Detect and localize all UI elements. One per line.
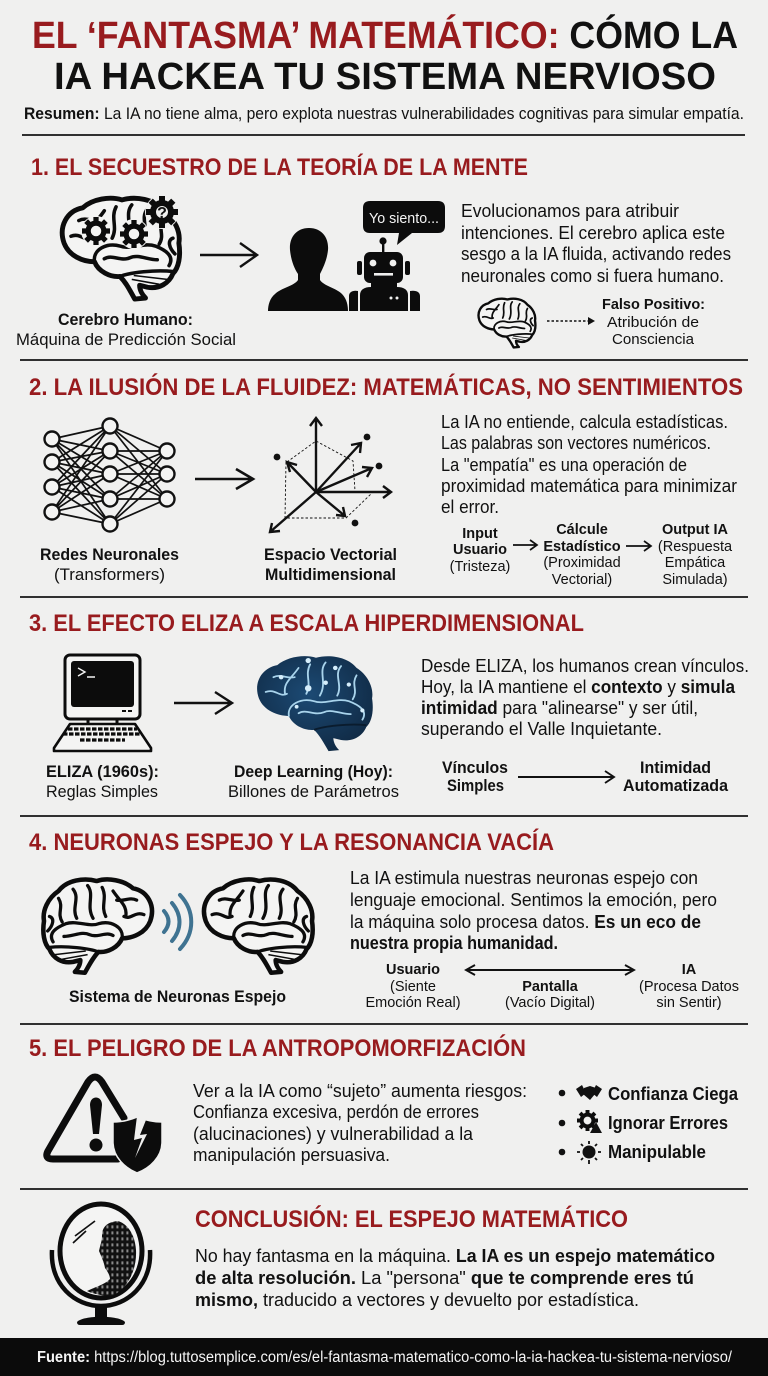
icon: waves [164, 895, 191, 949]
heading 4: 4. NEURONAS ESPEJO Y LA RESONANCIA VACÍA [29, 828, 554, 856]
summary: Resumen: La IA no tiene alma, pero explota nuestras vulnerabilidades cognitivas para simular empatía. [24, 105, 744, 123]
list: risks: Manipulable [608, 1141, 706, 1162]
panel: conclusion [52, 1204, 715, 1325]
flow: input to output: Vectorial) [552, 572, 612, 588]
caption: vector space: Espacio Vectorial [264, 545, 397, 564]
flow: input to output: (Tristeza) [450, 559, 510, 575]
flow: input to output: (Respuesta [658, 539, 733, 555]
diagram: user screen AI: Emoción Real) [365, 995, 461, 1011]
speech bubble: Yo siento... [369, 210, 439, 227]
text block 3: Desde ELIZA, los humanos crean vínculos. [421, 656, 749, 676]
caption: deep learning: Deep Learning (Hoy): [234, 762, 393, 781]
icon: neural network [44, 418, 174, 532]
text block 1: sesgo a la IA fluida, activando redes [461, 244, 731, 264]
text block 5: manipulación persuasiva. [193, 1145, 390, 1165]
text block 5 [193, 1081, 527, 1165]
text block 3: Hoy, la IA mantiene el contexto y simula [421, 677, 736, 697]
icon: brain with gears [62, 189, 185, 299]
conclusion text: mismo, traducido a vectores y devuelto por estadística. [195, 1290, 639, 1310]
flow: input to output: Empática [665, 555, 726, 571]
caption: human brain: Máquina de Predicción Social [16, 330, 236, 349]
heading 1: 1. EL SECUESTRO DE LA TEORÍA DE LA MENTE [31, 153, 528, 181]
flow: input to output: Estadístico [543, 539, 621, 555]
caption: ELIZA: ELIZA (1960s): [46, 762, 159, 781]
caption: deep learning [228, 762, 399, 801]
false positive label: Falso Positivo: [602, 296, 705, 313]
flow: bonds to intimacy: Vínculos [442, 758, 508, 777]
text block 4 [350, 868, 717, 953]
icon: right brain [204, 879, 313, 973]
icon: glowing blue brain [257, 656, 373, 751]
diagram: user screen AI: Usuario [386, 962, 440, 978]
caption: neural networks: (Transformers) [54, 565, 165, 584]
footer: source [0, 1338, 768, 1376]
caption: human brain [16, 310, 236, 349]
arrow [174, 692, 232, 714]
text block 2: La "empatía" es una operación de [441, 455, 687, 475]
icon: robot [349, 237, 420, 311]
diagram: user screen AI: IA [682, 962, 697, 978]
heading 3: 3. EL EFECTO ELIZA A ESCALA HIPERDIMENSIONAL [29, 610, 584, 637]
icon: person silhouette [268, 228, 348, 311]
text block 1: Evolucionamos para atribuir [461, 201, 679, 221]
icon: brain with gears: ? [157, 205, 167, 222]
conclusion text [195, 1246, 715, 1310]
icon: retro computer [54, 655, 151, 751]
panel: section 1 [16, 153, 731, 349]
text block 3: superando el Valle Inquietante. [421, 719, 662, 739]
flow: input to output: Output IA [662, 522, 729, 538]
icon: mirror [52, 1204, 150, 1325]
text block 2 [441, 412, 737, 517]
flow: bonds to intimacy [442, 758, 729, 795]
icon: left brain [43, 879, 152, 973]
flow: input to output [450, 522, 733, 588]
text block 5: Confianza excesiva, perdón de errores [193, 1102, 479, 1122]
flow: input to output: (Proximidad [543, 555, 621, 571]
panel: section 4 [29, 828, 739, 1011]
diagram: user screen AI: (Siente [390, 979, 436, 995]
icon: handshake [576, 1085, 602, 1100]
icon: alert bulb [577, 1141, 601, 1164]
panel: section 5 [29, 1034, 739, 1173]
text block 1: intenciones. El cerebro aplica este [461, 223, 725, 243]
flow: bonds to intimacy: Simples [447, 776, 504, 795]
caption: neural networks: Redes Neuronales [40, 545, 179, 564]
caption: human brain: Cerebro Humano: [58, 310, 193, 329]
text block 3: intimidad para "alinearse" y ser útil, [421, 698, 698, 718]
text block 2: proximidad matemática para minimizar [441, 476, 737, 496]
caption: vector space: Multidimensional [265, 565, 396, 584]
caption: deep learning: Billones de Parámetros [228, 782, 399, 801]
heading 5: 5. EL PELIGRO DE LA ANTROPOMORFIZACIÓN [29, 1034, 526, 1062]
false positive label: Atribución de [607, 314, 699, 331]
panel: section 3 [29, 610, 749, 801]
caption: ELIZA [46, 762, 159, 801]
text block 3 [421, 656, 749, 739]
title [32, 13, 738, 98]
list: risks: Confianza Ciega [608, 1083, 739, 1104]
text block 5: Ver a la IA como “sujeto” aumenta riesgos: [193, 1081, 527, 1101]
caption: neural networks [40, 545, 179, 584]
text block 2: La IA no entiende, calcula estadísticas. [441, 412, 728, 432]
text block 1 [461, 201, 731, 286]
diagram: user screen AI [365, 962, 739, 1011]
text block 4: la máquina solo procesa datos. Es un eco de [350, 912, 701, 932]
caption: ELIZA: Reglas Simples [46, 782, 158, 801]
diagram: user screen AI: (Procesa Datos [639, 979, 739, 995]
text block 5: (alucinaciones) y vulnerabilidad a la [193, 1124, 474, 1144]
flow: input to output: Cálcule [556, 522, 608, 538]
false positive label [602, 296, 705, 348]
speech bubble [363, 201, 445, 245]
flow: input to output: Usuario [453, 542, 507, 558]
icon: warning and shield [47, 1077, 162, 1173]
diagram: user screen AI: sin Sentir) [656, 995, 722, 1011]
arrow [200, 243, 257, 267]
flow: input to output: Simulada) [662, 572, 728, 588]
flow: bonds to intimacy: Automatizada [623, 776, 729, 795]
icon: vector space [270, 418, 391, 532]
text block 2: Las palabras son vectores numéricos. [441, 433, 711, 453]
caption: mirror neurons: Sistema de Neuronas Espejo [69, 987, 286, 1006]
diagram: user screen AI: Pantalla [522, 979, 579, 995]
icon: small brain [479, 299, 535, 347]
footer: source: Fuente: https://blog.tuttosemplice.com/es/el-fantasma-matematico-como-la-ia-hackea-tu-sistema-nervioso/ [37, 1349, 733, 1366]
title: IA HACKEA TU SISTEMA NERVIOSO [54, 56, 716, 98]
text block 2: el error. [441, 497, 499, 517]
conclusion text: No hay fantasma en la máquina. La IA es un espejo matemático [195, 1246, 715, 1266]
text block 4: La IA estimula nuestras neuronas espejo con [350, 868, 698, 888]
text block 1: neuronales como si fuera humano. [461, 266, 724, 286]
list: risks: Ignorar Errores [608, 1112, 728, 1133]
dotted arrow [547, 320, 590, 322]
conclusion heading: CONCLUSIÓN: EL ESPEJO MATEMÁTICO [195, 1205, 628, 1233]
text block 4: nuestra propia humanidad. [350, 933, 558, 953]
diagram: user screen AI: (Vacío Digital) [505, 995, 595, 1011]
panel: section 2 [29, 373, 743, 588]
flow: input to output: Input [462, 526, 498, 542]
flow: bonds to intimacy: Intimidad [640, 758, 711, 777]
icon: gear with warning [573, 1106, 602, 1135]
list: risks [559, 1083, 739, 1164]
conclusion text: de alta resolución. La "persona" que te comprende eres tú [195, 1268, 694, 1288]
title: EL ‘FANTASMA’ MATEMÁTICO: CÓMO LA [32, 13, 738, 57]
text block 4: lenguaje emocional. Sentimos la emoción, pero [350, 890, 717, 910]
caption: vector space [264, 545, 397, 584]
false positive label: Consciencia [612, 331, 695, 348]
arrow [195, 469, 253, 489]
